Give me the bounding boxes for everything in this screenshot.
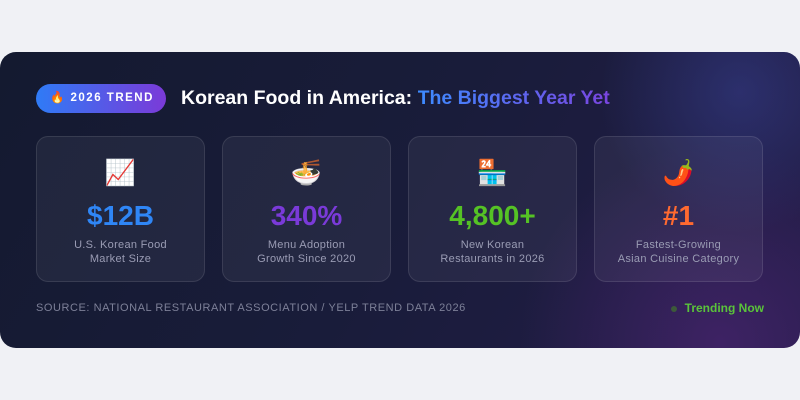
stat card: menu adoption: Growth Since 2020: [257, 253, 356, 265]
stat card: fastest growing: [594, 136, 763, 282]
panel: main card: [0, 52, 800, 348]
stat card: new restaurants: New Korean: [461, 239, 524, 251]
stat card: fastest growing: Asian Cuisine Category: [618, 253, 739, 265]
stat card: market size: U.S. Korean Food: [74, 239, 167, 251]
stat card: new restaurants: Restaurants in 2026: [440, 253, 545, 265]
stat card: fastest growing: #1: [663, 200, 694, 231]
source text: SOURCE: NATIONAL RESTAURANT ASSOCIATION / YELP TREND DATA 2026: [36, 302, 466, 314]
stat card: market size: Market Size: [90, 253, 151, 265]
stat card: new restaurants: 4,800+: [449, 200, 536, 231]
badge: 2026 trend: 🔥 2026 TREND: [50, 92, 154, 104]
trending now indicator: Trending Now: [685, 301, 764, 315]
badge: 2026 trend: [36, 84, 166, 113]
stat card: market size: 📈: [105, 159, 136, 188]
stat card: market size: [36, 136, 205, 282]
stat card: menu adoption: 🍜: [291, 159, 322, 188]
stat card: fastest growing: Fastest-Growing: [636, 239, 721, 251]
stat card: menu adoption: 340%: [271, 200, 342, 231]
stat card: new restaurants: 🏪: [477, 159, 508, 188]
stat card: fastest growing: 🌶️: [663, 159, 694, 188]
title: Korean Food in America: The Biggest Year Yet: [181, 87, 610, 109]
stat card: menu adoption: Menu Adoption: [268, 239, 345, 251]
stat card: menu adoption: [222, 136, 391, 282]
stat card: market size: $12B: [87, 200, 154, 231]
stat card: new restaurants: [408, 136, 577, 282]
